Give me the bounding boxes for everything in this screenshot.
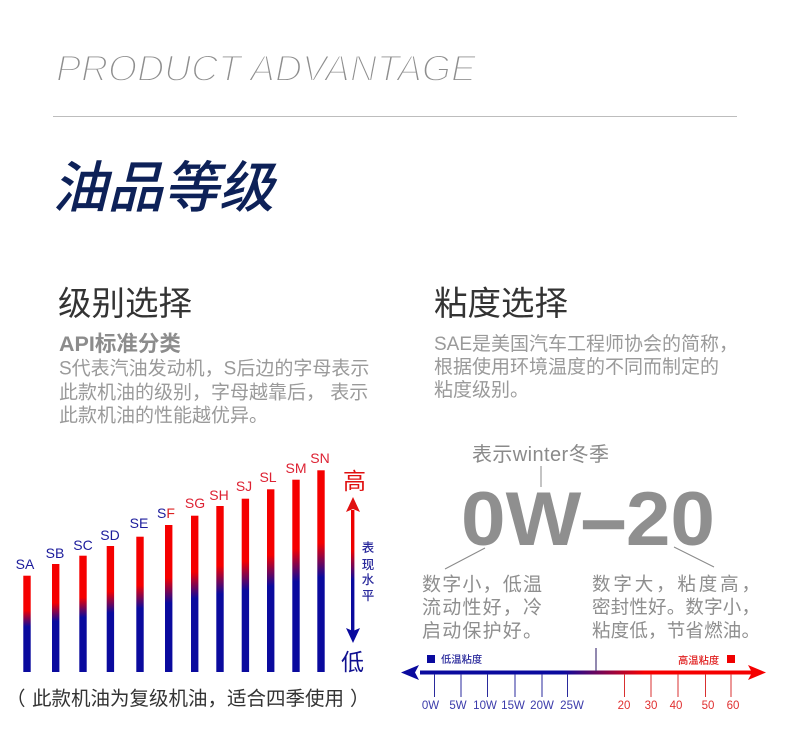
caption: multigrade oil note: （ xyxy=(6,688,26,710)
bar chart: API grades: SD xyxy=(100,527,120,543)
arrow: performance level: 低 xyxy=(341,649,364,675)
subheading: API: API标准分类 xyxy=(59,332,181,356)
bar chart: API grades: SG xyxy=(185,495,205,511)
bar chart: API grades: SJ xyxy=(236,478,252,494)
legend: low temp xyxy=(427,653,482,666)
section: grade selection xyxy=(58,286,369,426)
viscosity scale: 60 xyxy=(727,700,739,712)
text block: SAE description xyxy=(434,333,738,401)
text block: API description: S代表汽油发动机，S后边的字母表示 xyxy=(59,358,369,380)
viscosity scale: 20W xyxy=(530,700,554,712)
viscosity code diagram xyxy=(422,443,760,642)
text block: API description: 此款机油的性能越优异。 xyxy=(59,404,268,426)
viscosity scale xyxy=(401,648,766,712)
ticks: summer grades xyxy=(624,674,731,697)
text block: SAE description: 粘度级别。 xyxy=(434,379,529,401)
bar chart: API grades: SC xyxy=(73,537,93,553)
arrow: performance level: 现 xyxy=(362,558,375,572)
text: large number: 密封性好。数字小， xyxy=(592,596,760,618)
viscosity scale: 0W xyxy=(422,700,439,712)
title: 油品等级 xyxy=(52,157,278,219)
bar chart: API grades: SL xyxy=(259,469,277,485)
arrow: performance level: 平 xyxy=(362,589,374,603)
text: small number: 启动保护好。 xyxy=(422,620,542,642)
text: small number xyxy=(422,574,542,642)
viscosity scale: 30 xyxy=(645,700,657,712)
viscosity scale: 10W xyxy=(473,700,497,712)
text: large number: 粘度低，节省燃油。 xyxy=(592,620,760,641)
legend: high temp: 高温粘度 xyxy=(678,654,719,667)
legend: high temp xyxy=(678,654,735,667)
bar chart: API grades xyxy=(16,450,330,672)
legend: low temp: 低温粘度 xyxy=(441,653,482,666)
header: product advantage: PRODUCT ADVANTAGE xyxy=(56,48,477,89)
bar chart: API grades: SA xyxy=(16,556,35,572)
bar chart: API grades: SN xyxy=(310,450,330,466)
text block: SAE description: SAE是美国汽车工程师协会的简称， xyxy=(434,333,738,355)
viscosity scale: 50 xyxy=(702,700,714,712)
heading: viscosity selection: 粘度选择 xyxy=(434,286,568,323)
text: small number: 流动性好，冷 xyxy=(422,596,542,618)
caption: multigrade oil note: 此款机油为复级机油，适合四季使用 xyxy=(32,688,344,710)
viscosity scale: 40 xyxy=(670,700,682,712)
text: small number: 数字小，低温 xyxy=(422,574,542,596)
arrow: performance level: 水 xyxy=(362,572,375,587)
bar chart: API grades: SE xyxy=(130,515,148,531)
text block: API description: 此款机油的级别，字母越靠后， 表示 xyxy=(59,382,368,404)
arrow: performance level xyxy=(341,468,375,675)
viscosity scale: 15W xyxy=(501,700,525,712)
text: large number xyxy=(592,574,760,641)
text: large number: 数字大，粘度高， xyxy=(592,574,760,594)
viscosity scale: 25W xyxy=(560,700,584,712)
bar chart: API grades: SM xyxy=(286,460,306,476)
heading: grade selection: 级别选择 xyxy=(58,286,192,323)
text block: API description xyxy=(59,358,369,426)
text block: SAE description: 根据使用环境温度的不同而制定的 xyxy=(434,356,719,378)
label: winter: 表示winter冬季 xyxy=(472,443,609,466)
caption: multigrade oil note: ） xyxy=(350,688,370,710)
big code 0W-20: 0W–20 xyxy=(461,477,715,562)
bar chart: API grades: SF xyxy=(157,505,175,521)
viscosity scale: 20 xyxy=(618,700,630,712)
section: viscosity selection xyxy=(434,286,738,401)
arrow: performance level: 高 xyxy=(343,468,366,494)
ticks: winter grades xyxy=(434,674,568,697)
bar chart: API grades: SH xyxy=(209,487,229,503)
viscosity scale: 5W xyxy=(449,700,467,712)
arrow: performance level: 表 xyxy=(362,540,375,555)
bar chart: API grades: SB xyxy=(46,545,64,561)
